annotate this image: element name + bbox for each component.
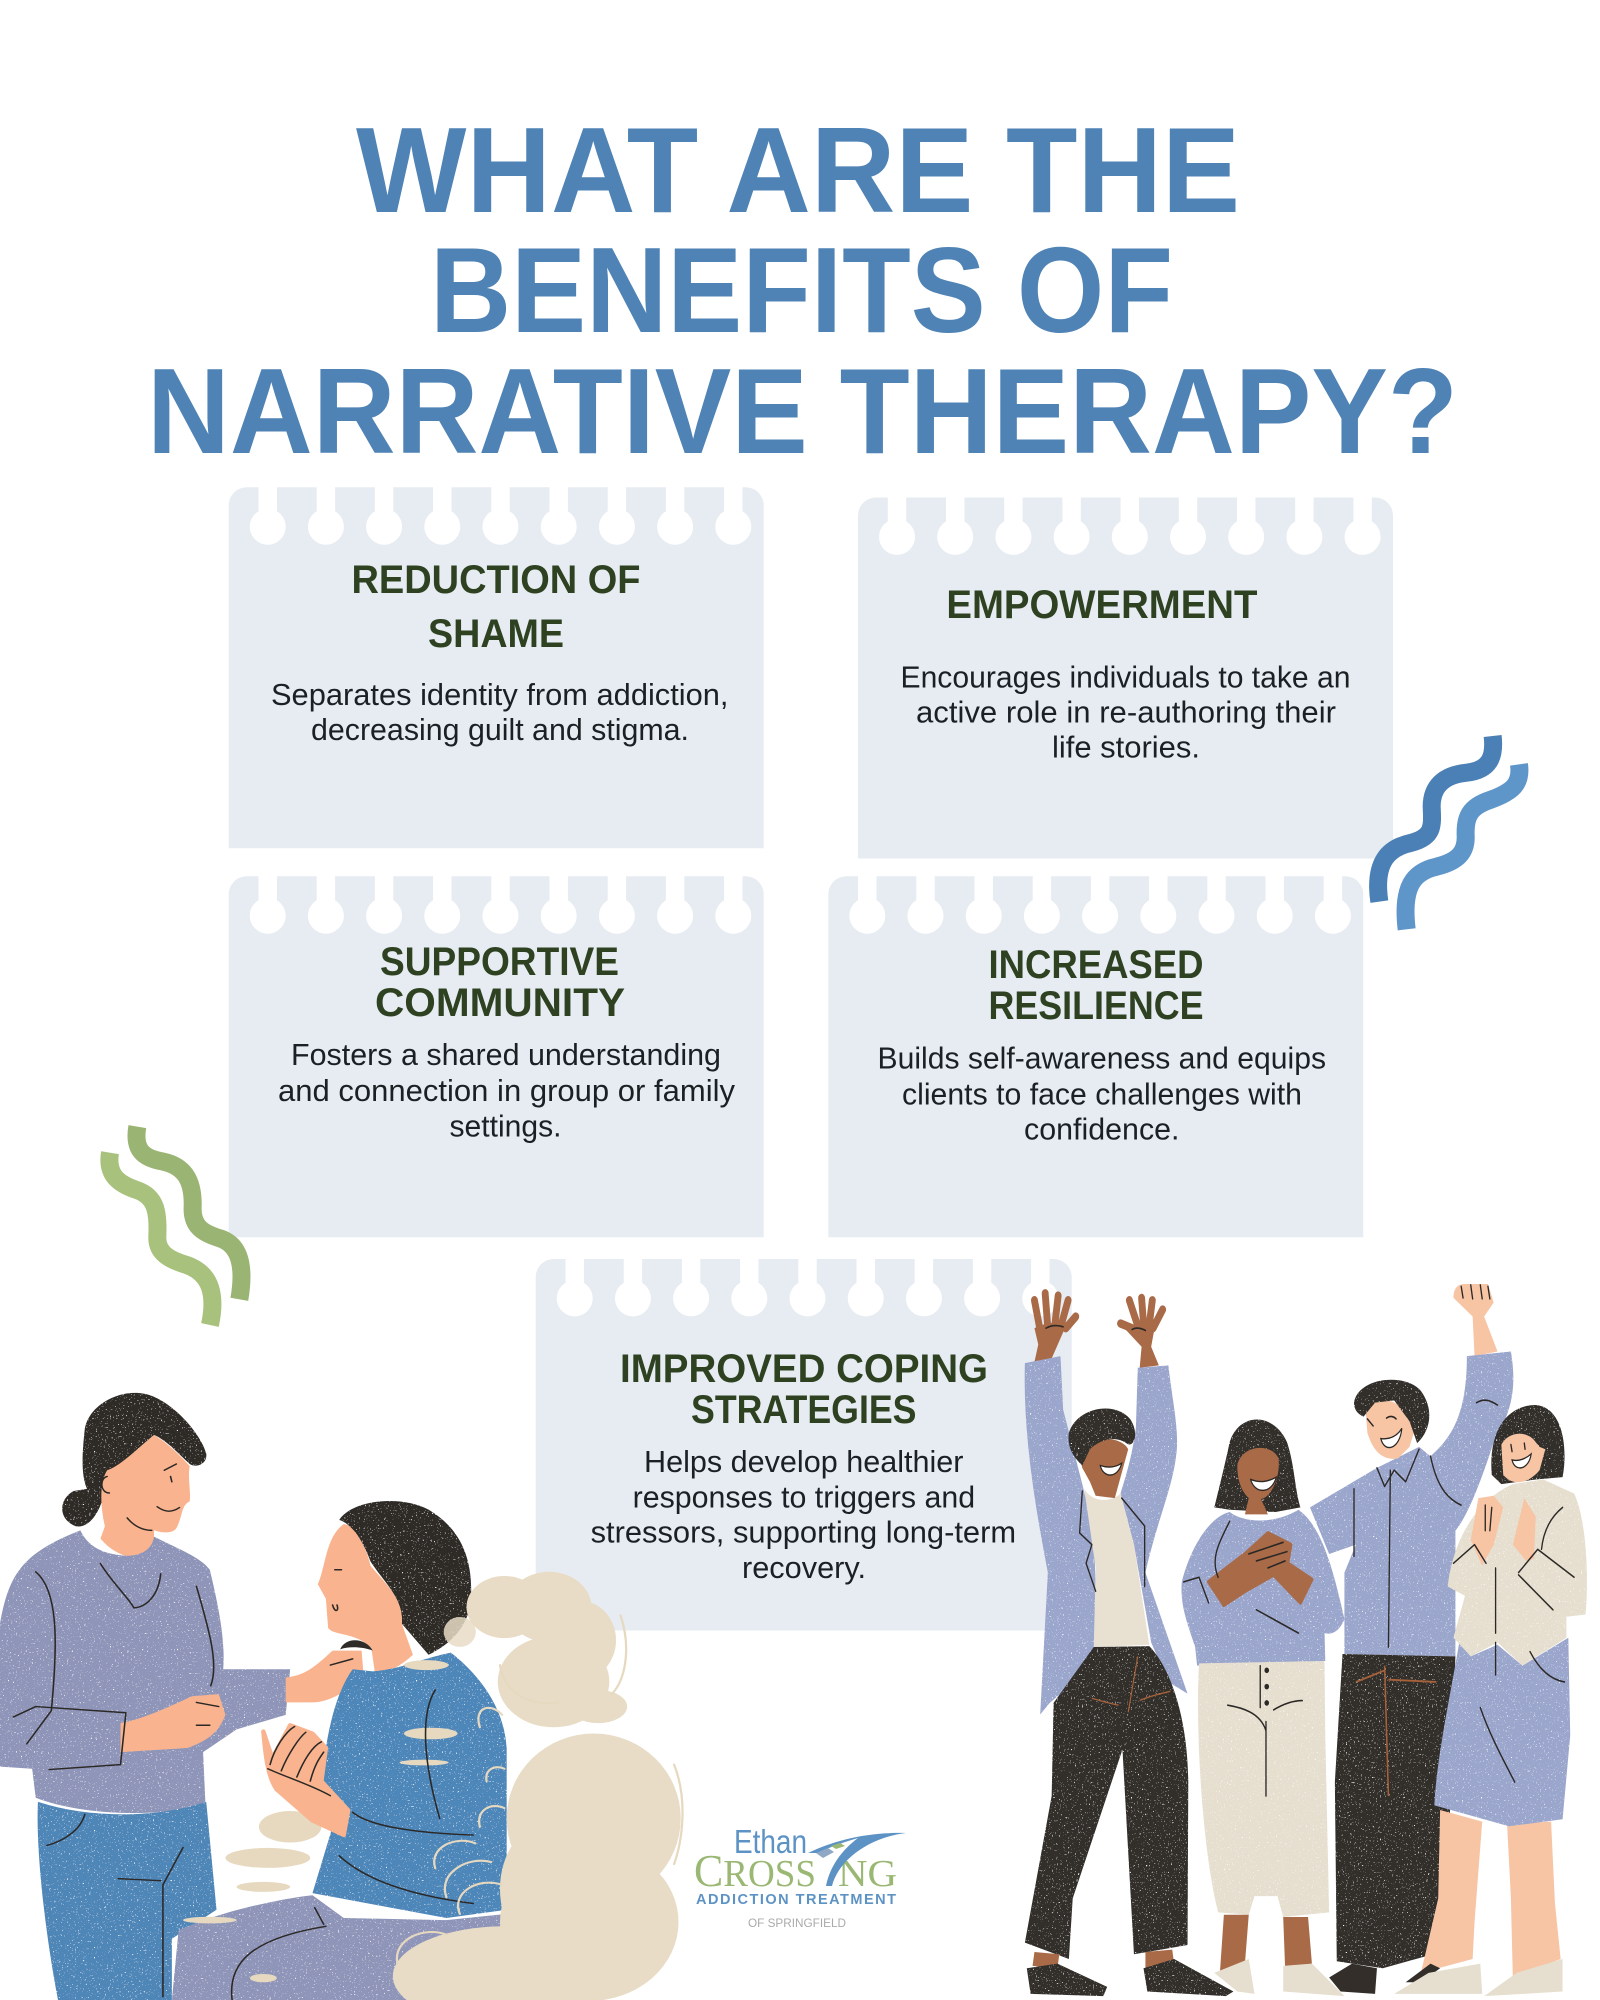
smoke swirls over body (397, 1615, 683, 1964)
panel: increased resilience: clients to face challenges with (902, 1076, 1302, 1112)
panel: supportive community: settings. (450, 1108, 562, 1144)
panel: reduction of shame: SHAME (428, 612, 564, 656)
icon: road (808, 1833, 906, 1886)
panel: reduction of shame: decreasing guilt and stigma. (311, 712, 689, 747)
icon: green squiggles (109, 1127, 241, 1325)
panel: reduction of shame: Separates identity from addiction, (271, 677, 728, 712)
panel: supportive community (229, 875, 764, 1237)
icon: blue squiggles (1378, 736, 1519, 929)
panel: improved coping strategies: IMPROVED COPING (620, 1347, 988, 1391)
logo: Ethan Crossing Addiction Treatment: CROSS (694, 1846, 816, 1896)
standing woman (0, 1393, 364, 2000)
panel: reduction of shame: REDUCTION OF (352, 558, 640, 602)
panel: empowerment: EMPOWERMENT (946, 583, 1257, 627)
panel: improved coping strategies: STRATEGIES (691, 1388, 916, 1432)
panel: empowerment (858, 496, 1393, 858)
logo: Ethan Crossing Addiction Treatment: OF SPRINGFIELD (748, 1918, 846, 1930)
title (147, 102, 1458, 479)
panel: increased resilience: RESILIENCE (988, 984, 1204, 1028)
title: NARRATIVE THERAPY? (147, 343, 1458, 479)
panel: improved coping strategies: recovery. (742, 1550, 866, 1585)
panel: increased resilience: INCREASED (988, 943, 1204, 987)
panel: improved coping strategies: responses to triggers and (633, 1480, 975, 1514)
person: woman with hands on chest (1181, 1420, 1344, 1996)
panel: empowerment: life stories. (1052, 730, 1200, 764)
panel: improved coping strategies (536, 1258, 1072, 1630)
logo: Ethan Crossing Addiction Treatment: ADDICTION TREATMENT (696, 1892, 896, 1908)
panel: increased resilience: confidence. (1024, 1112, 1180, 1146)
logo: Ethan Crossing Addiction Treatment: Ethan (734, 1823, 807, 1860)
title: WHAT ARE THE (356, 102, 1240, 238)
panel: reduction of shame (229, 486, 764, 848)
illustration: two women talking with smoke (0, 1393, 683, 2000)
panel: improved coping strategies: stressors, supporting long-term (591, 1514, 1016, 1550)
person: clapping woman (1394, 1405, 1587, 1996)
logo: Ethan Crossing Addiction Treatment: NG (838, 1853, 897, 1895)
panel: supportive community: Fosters a shared understanding (291, 1037, 721, 1072)
smoke front (393, 1572, 681, 2000)
smoke behind (225, 1811, 321, 1892)
panel: supportive community: and connection in group or family (278, 1073, 735, 1108)
panel: increased resilience: Builds self-awareness and equips (878, 1040, 1326, 1076)
illustration: celebrating group of four (1025, 1284, 1587, 1996)
panel: empowerment: Encourages individuals to take an (900, 660, 1350, 694)
smears on clothing (183, 1660, 458, 1982)
logo: Ethan Crossing Addiction Treatment (694, 1823, 906, 1930)
panel: empowerment: active role in re-authoring their (916, 694, 1336, 730)
title: BENEFITS OF (430, 222, 1173, 358)
person: man with raised fist (1310, 1284, 1513, 1994)
seated woman (172, 1501, 507, 2000)
panel: increased resilience (828, 875, 1363, 1237)
panel: improved coping strategies: Helps develop healthier (644, 1444, 964, 1479)
panel: supportive community: SUPPORTIVE (380, 940, 619, 984)
panel: supportive community: COMMUNITY (375, 981, 625, 1025)
person: man with raised arms (1025, 1293, 1233, 1996)
